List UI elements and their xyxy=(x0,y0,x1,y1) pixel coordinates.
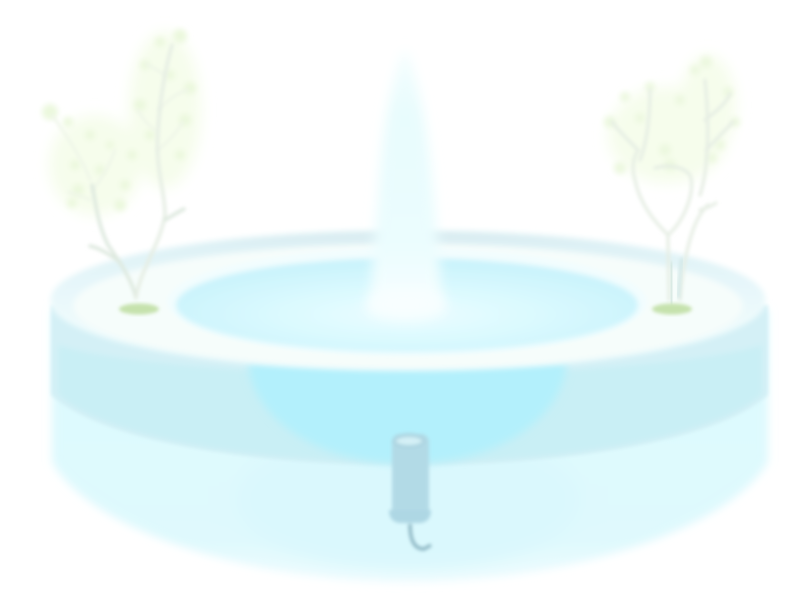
basin: lower water wall xyxy=(52,310,768,582)
basin: rim xyxy=(50,229,766,371)
basin: upper wall wedge xyxy=(51,305,768,465)
pump opening xyxy=(394,435,424,447)
foliage right xyxy=(608,55,736,183)
basin: darker water band xyxy=(58,345,762,463)
fountain jet xyxy=(366,48,446,320)
branches left xyxy=(52,64,188,200)
foliage left xyxy=(49,32,201,215)
pump body xyxy=(392,434,429,520)
ground patch left xyxy=(119,304,159,314)
basin: central glow through wall xyxy=(248,362,567,464)
tree: left xyxy=(42,29,201,314)
ground patch right xyxy=(652,304,692,314)
pool: water surface xyxy=(176,258,638,352)
pump cable xyxy=(410,524,431,549)
pump xyxy=(389,434,431,549)
pool: white inner ring xyxy=(167,248,647,356)
trunk left xyxy=(90,45,184,298)
trunk right xyxy=(612,80,733,300)
tree: right xyxy=(604,55,740,314)
